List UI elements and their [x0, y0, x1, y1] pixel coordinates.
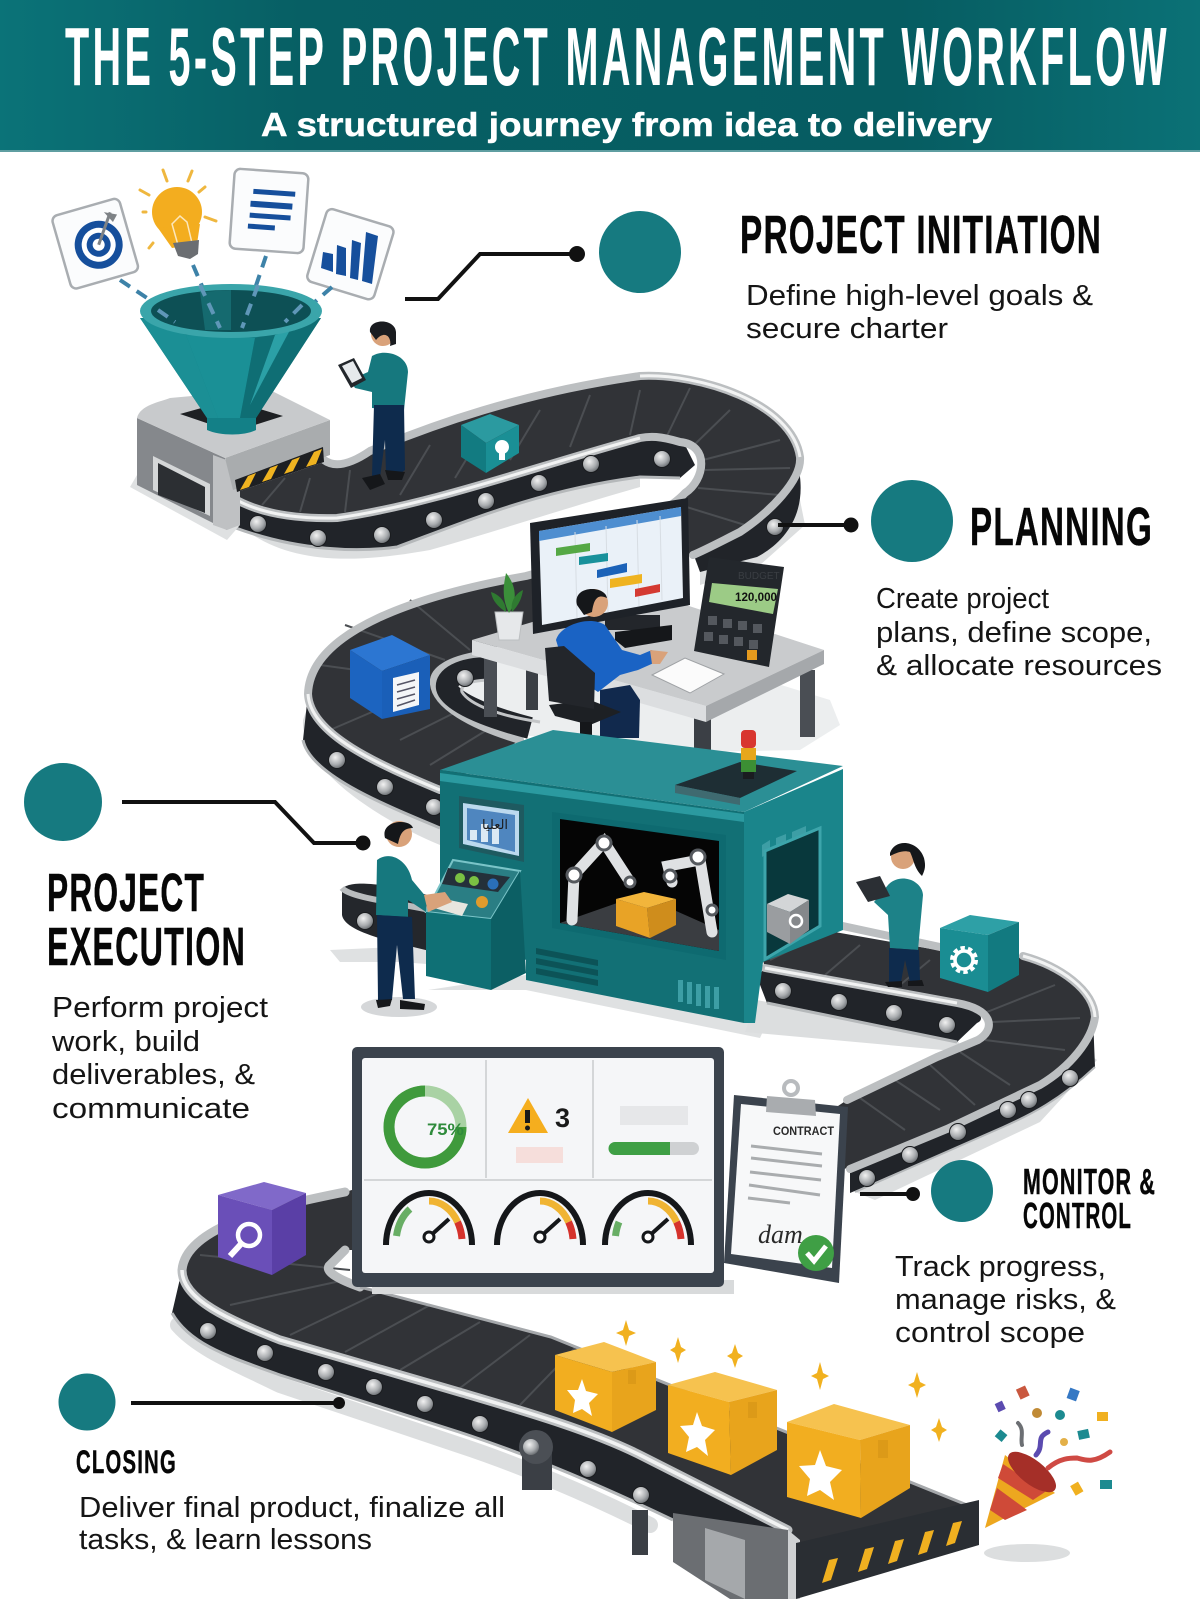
belt surface [233, 378, 798, 790]
paper on desk [652, 658, 724, 693]
subtitle: A structured journey from idea to delivery [261, 106, 993, 143]
text: monitor and control [895, 1251, 1116, 1349]
text: planning: plans, define scope, [876, 617, 1152, 649]
text: project initiation [746, 280, 1093, 345]
heading: project execution: EXECUTION [47, 917, 246, 977]
icon: document card [229, 169, 309, 253]
heading: project execution [47, 863, 246, 977]
belt surface [755, 928, 1093, 1172]
text: project execution [51, 992, 268, 1125]
text: project execution: Perform project [52, 992, 268, 1024]
gold star box 1 [555, 1342, 656, 1432]
conveyor: lower delivery section [172, 1170, 979, 1599]
step marker: monitor and control [931, 1160, 993, 1222]
donut: 75% [389, 1091, 464, 1163]
warning count: 3 [555, 1103, 570, 1133]
donut: 75%: 75% [427, 1120, 464, 1139]
calculator with budget: BUDGET [738, 571, 780, 582]
sparkles [616, 1320, 947, 1442]
contract clipboard: CONTRACT [773, 1126, 834, 1138]
teal machine [426, 730, 843, 1023]
inner hook band [447, 668, 530, 728]
step marker: project execution [24, 763, 102, 841]
gauge 1 [386, 1193, 472, 1245]
heading: monitor and control [1023, 1161, 1156, 1236]
leader line: closing [131, 1397, 345, 1409]
text: monitor and control: control scope [895, 1317, 1085, 1349]
calculator with budget [694, 557, 784, 667]
text: project execution: communicate [52, 1093, 250, 1125]
text: closing: tasks, & learn lessons [79, 1524, 372, 1556]
machine exit door and box [765, 828, 820, 959]
person: planner at desk [545, 589, 668, 738]
hazard strip [235, 447, 324, 492]
leader line: project initiation [405, 246, 585, 299]
step marker: closing [58, 1374, 116, 1430]
step marker: project initiation [599, 211, 681, 293]
gauge 2 [497, 1193, 583, 1245]
text: planning: & allocate resources [876, 650, 1162, 682]
text: monitor and control: manage risks, & [895, 1284, 1116, 1316]
heading: closing: CLOSING [76, 1444, 177, 1480]
party popper and confetti [984, 1385, 1112, 1562]
icon: bar chart card [306, 208, 395, 301]
end panel with hazard stripes [796, 1500, 979, 1599]
blue clipboard box [350, 635, 430, 719]
text: project execution: deliverables, & [52, 1059, 255, 1091]
rollers [250, 450, 784, 816]
leader line: monitor and control [860, 1187, 920, 1201]
cube: teal lightbulb [461, 414, 519, 473]
icon: target card [51, 198, 139, 290]
control panel [426, 860, 526, 990]
leader line: planning [778, 518, 858, 532]
side bands [757, 968, 1095, 1193]
text: planning: Create project [876, 583, 1049, 615]
person: machine operator [361, 821, 452, 1017]
person: inspector with tablet [856, 843, 925, 987]
leader line: project execution [122, 802, 370, 850]
plant [491, 573, 523, 640]
text: project initiation: secure charter [746, 313, 948, 345]
text: project initiation: Define high-level goals & [746, 280, 1093, 312]
gold star box 3 [787, 1404, 910, 1518]
monitor with gantt chart [530, 498, 690, 648]
dashed feed lines [120, 256, 332, 330]
purple magnifier box [218, 1182, 306, 1275]
text: planning [876, 583, 1162, 682]
cube: teal gear [940, 915, 1019, 992]
calculator with budget: 120,000 [735, 590, 777, 604]
step marker: planning [871, 480, 953, 562]
text: closing: Deliver final product, finalize all [79, 1492, 505, 1524]
machine window with robot arms [552, 812, 726, 960]
belt slats [262, 388, 790, 765]
rollers and brackets [200, 1322, 650, 1555]
icon: light bulb [140, 170, 216, 259]
text: monitor and control: Track progress, [895, 1251, 1106, 1283]
contract clipboard [724, 1081, 848, 1283]
header banner [0, 0, 1200, 152]
desk [472, 590, 824, 750]
floor shading under desk [440, 660, 840, 752]
vent marks [678, 826, 806, 1009]
rails [765, 925, 1095, 1169]
conveyor: short segment left of machine [330, 884, 445, 965]
control screen: العليا [482, 818, 508, 833]
rails [233, 376, 800, 790]
heading: project execution: PROJECT [47, 863, 205, 923]
side bands [233, 438, 801, 828]
control screen [459, 796, 524, 862]
funnel [140, 284, 322, 434]
machine floor shadow [428, 975, 775, 1038]
progress panel [608, 1106, 699, 1155]
conveyor: middle right section [745, 925, 1097, 1200]
rollers [774, 982, 1078, 1186]
text: closing [79, 1492, 505, 1556]
contract clipboard: dam. [758, 1220, 809, 1249]
text: project execution: work, build [51, 1026, 200, 1058]
person: reviewing tablet [338, 322, 408, 490]
beacon pad and light [675, 730, 797, 805]
gold star box 2 [668, 1372, 777, 1475]
end block [673, 1513, 788, 1599]
gauge 3 [605, 1193, 691, 1245]
conveyor: upper S-curve [233, 376, 805, 845]
funnel machine base [130, 389, 330, 540]
dashboard monitor [352, 1047, 734, 1294]
warning count [508, 1098, 570, 1163]
